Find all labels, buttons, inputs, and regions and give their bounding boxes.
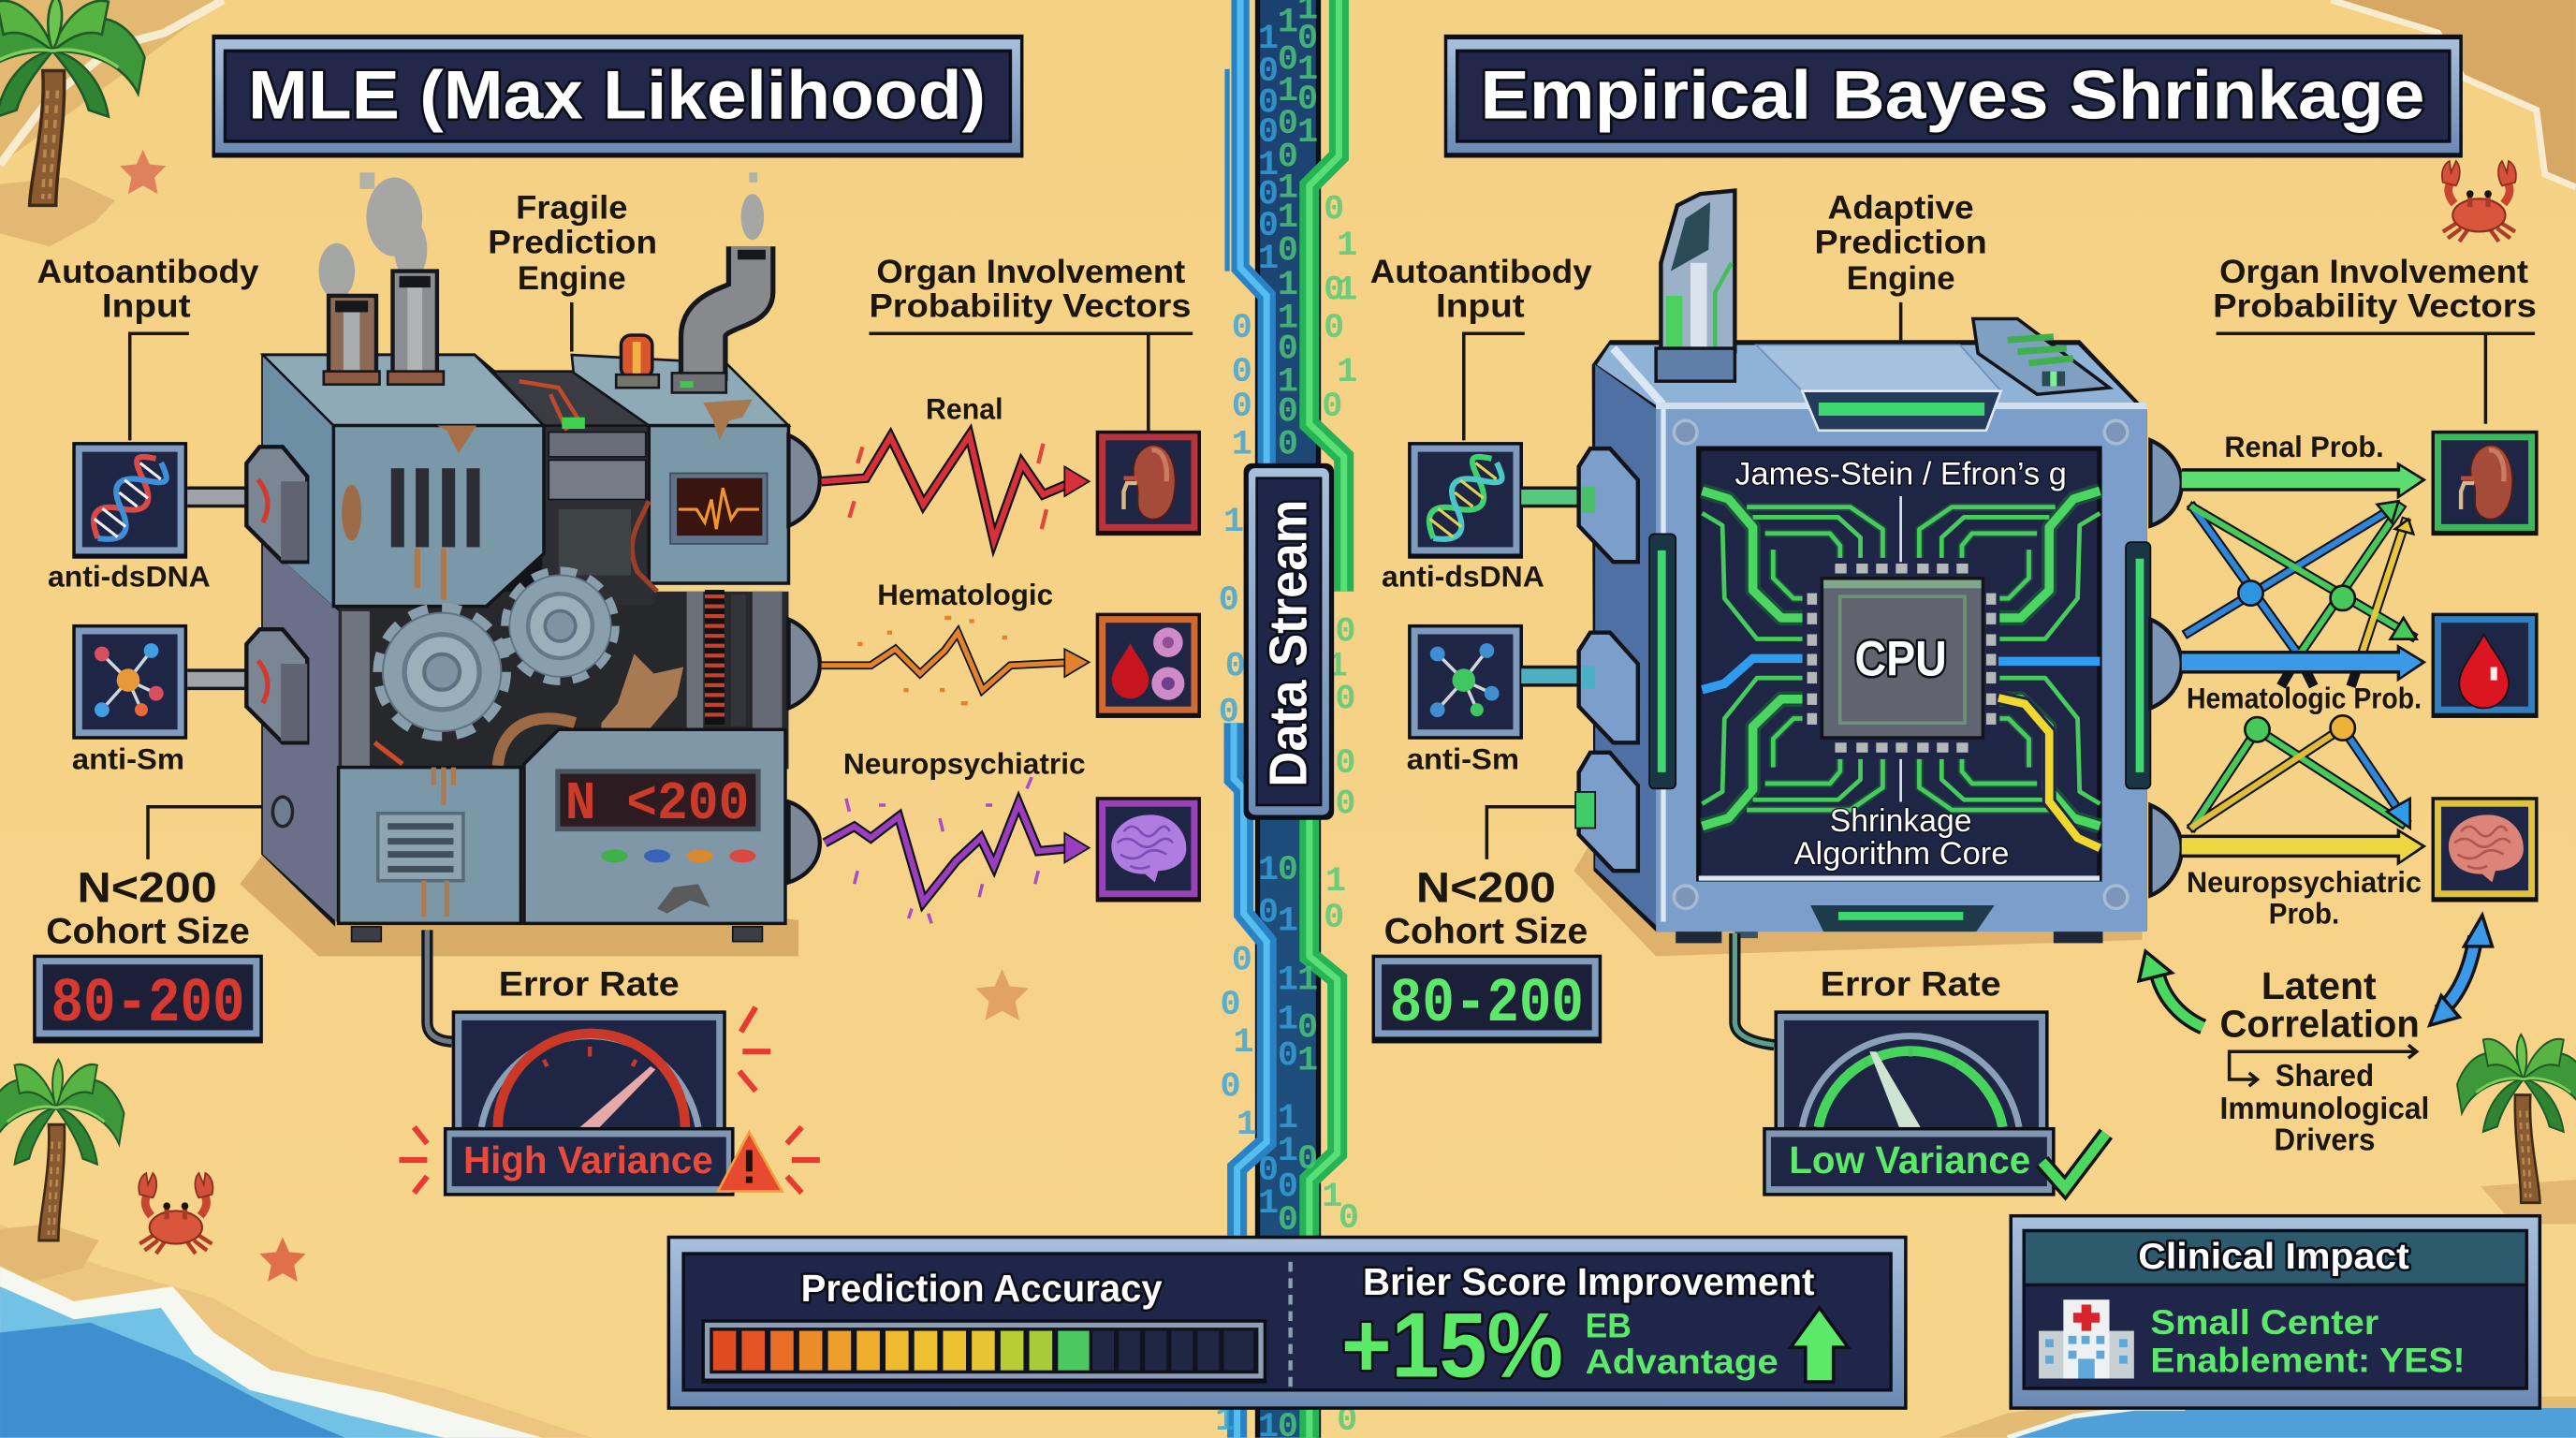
data stream channel: 1 (1337, 227, 1357, 266)
latent correlation block (2220, 964, 2429, 1158)
data stream channel: 1 (1258, 146, 1279, 185)
data stream channel: 0 (1258, 52, 1279, 92)
exhaust stack (1656, 191, 1734, 381)
left: autoantibody input label (37, 254, 259, 440)
data stream channel: 0 (1278, 1201, 1298, 1240)
output knobs (788, 435, 820, 882)
data stream channel: 0 (1219, 581, 1239, 621)
correlation network (2188, 501, 2417, 829)
warning lamp (616, 335, 659, 388)
warning triangle with alert rays (400, 1007, 820, 1193)
left error rate gauge: High Variance (463, 1138, 713, 1181)
clinical impact panel (2009, 1214, 2541, 1410)
latent correlation block: Shared (2276, 1059, 2374, 1093)
right engine label: Engine (1847, 260, 1955, 297)
data stream channel: 0 (1232, 388, 1252, 427)
data stream label panel: Data Stream (1258, 500, 1317, 787)
right icon: anti-Sm (1408, 624, 1523, 740)
data stream channel: 1 (1223, 503, 1244, 542)
data stream channel: 0 (1324, 309, 1344, 348)
data stream channel: 1 (1278, 902, 1298, 941)
palm tree bottom-left (0, 1060, 124, 1282)
clinical impact panel: Small Center (2150, 1303, 2378, 1342)
data stream channel: 0 (1278, 1168, 1298, 1208)
data stream channel: 0 (1219, 693, 1239, 732)
data stream channel: 1 (1278, 198, 1298, 238)
data stream channel: 0 (1278, 425, 1298, 464)
left organ icon: brain (1096, 797, 1201, 902)
intake grille (378, 768, 463, 917)
data stream channel: 1 (1297, 113, 1318, 153)
right engine label (1814, 189, 1987, 340)
left error rate gauge (427, 930, 735, 1196)
right: autoantibody input label: Input (1436, 288, 1525, 325)
data stream channel: 0 (1258, 113, 1279, 153)
blue double curved arrow (2430, 916, 2492, 1025)
red ladder (687, 590, 782, 742)
corner bolts (1674, 420, 2128, 909)
data stream channel: 1 (1278, 1001, 1298, 1040)
hematologic signal (noisy): Hematologic (877, 578, 1053, 611)
right title (1444, 35, 2463, 157)
renal signal (noisy): Renal (926, 392, 1003, 426)
data stream channel: 1 (1278, 169, 1298, 209)
yellow probability arrow: neuropsychiatric (2182, 829, 2426, 866)
data stream channel: 0 (1335, 612, 1355, 652)
screen labels: Algorithm Core (1794, 836, 2009, 872)
right cohort block: N<200 (1416, 864, 1556, 912)
left input pipes (187, 486, 263, 690)
right outputs label: Probability Vectors (2213, 288, 2537, 325)
neuropsychiatric signal (noisy) (825, 747, 1090, 923)
palm tree bottom-right (2457, 1034, 2576, 1224)
screen labels: James-Stein / Efron’s g (1734, 457, 2067, 492)
data stream channel: 0 (1221, 1068, 1241, 1108)
right cohort block: 80-200 (1390, 969, 1584, 1040)
brier score improvement: EB (1586, 1307, 1632, 1345)
brier score improvement: Advantage (1586, 1343, 1778, 1381)
right cohort block (1372, 807, 1602, 1043)
right output labels: Prob. (2269, 896, 2339, 930)
brier score improvement: Brier Score Improvement (1363, 1260, 1814, 1303)
left label: anti-Sm: anti-Sm (72, 741, 184, 775)
data stream channel: 0 (1322, 388, 1342, 427)
data stream channel: 1 (1278, 3, 1298, 42)
data stream channel: 0 (1232, 941, 1252, 980)
data stream channel: 1 (1297, 961, 1318, 1001)
data stream channel: 0 (1278, 330, 1298, 370)
data stream channel: 0 (1278, 105, 1298, 144)
data stream channel: 1 (1258, 1184, 1279, 1224)
data stream channel: 0 (1258, 1152, 1279, 1191)
data stream channel: 0 (1324, 899, 1344, 938)
data stream channel: 0 (1324, 271, 1344, 310)
data stream channel: 0 (1335, 744, 1355, 784)
data stream channel: 1 (1278, 72, 1298, 111)
latent correlation block: Drivers (2274, 1123, 2375, 1158)
starfish top-left (120, 150, 166, 194)
N<200 display: N <200 (565, 774, 749, 835)
green light slots (1649, 391, 2150, 932)
data stream channel: 1 (1278, 1099, 1298, 1138)
data stream channel: 0 (1335, 680, 1355, 719)
roof vent (1973, 318, 2110, 394)
chimneys and smoke (319, 172, 766, 392)
data stream channel: 0 (1297, 1008, 1318, 1048)
data stream channel: 0 (1225, 647, 1246, 686)
left error rate gauge: Error Rate (499, 965, 680, 1004)
data stream channel: 1 (1337, 271, 1357, 310)
right organ icon: brain (2431, 797, 2539, 902)
data stream channel: 0 (1324, 190, 1344, 229)
data stream channel: 1 (1325, 862, 1346, 902)
data stream channel: 0 (1278, 231, 1298, 271)
left engine label: Prediction (488, 224, 657, 260)
data stream channel: 0 (1278, 138, 1298, 177)
crab bottom-left (139, 1173, 212, 1254)
status buttons (601, 849, 755, 862)
data stream channel: 0 (1297, 81, 1318, 120)
left outputs label: Organ Involvement (876, 254, 1186, 290)
data stream channel: 0 (1278, 41, 1298, 81)
right title: Empirical Bayes Shrinkage (1480, 55, 2424, 133)
right cohort block: Cohort Size (1384, 911, 1588, 951)
left label: anti-dsDNA: anti-dsDNA (48, 560, 211, 594)
right engine label: Prediction (1814, 224, 1987, 260)
CPU chip: CPU (1854, 631, 1947, 686)
circuit traces (1702, 491, 2100, 848)
renal signal (noisy) (822, 392, 1090, 540)
left organ icon: blood cells (1096, 613, 1201, 718)
data stream channel: 0 (1258, 176, 1279, 215)
left outputs label: Probability Vectors (869, 288, 1191, 325)
right icon: anti-dsDNA (1408, 442, 1523, 559)
brier score improvement (1341, 1260, 1848, 1397)
data stream channel: 0 (1278, 1036, 1298, 1076)
right output labels: Renal Prob. (2224, 430, 2384, 463)
left cohort block (33, 807, 263, 1043)
left cohort block: 80-200 (51, 969, 245, 1040)
data stream channel: 1 (1278, 266, 1298, 305)
right input pipes (1521, 486, 1597, 687)
right label: anti-Sm: anti-Sm (1407, 741, 1519, 775)
left organ icon: kidney (1096, 431, 1201, 536)
right organ icon: blood drop (2431, 613, 2539, 718)
side connectors (1575, 448, 1638, 871)
right error rate gauge: Error Rate (1821, 965, 2001, 1004)
data stream channel: 1 (1278, 961, 1298, 1001)
starfish mid (975, 969, 1029, 1020)
CPU chip (1808, 564, 1996, 753)
green check mark (2042, 1134, 2106, 1188)
right engine label: Adaptive (1828, 189, 1974, 226)
right error rate gauge (1734, 933, 2056, 1196)
right output labels: Neuropsychiatric (2187, 865, 2422, 899)
data stream channel: 1 (1278, 299, 1298, 338)
data stream channel: 1 (1232, 425, 1252, 464)
left outputs label (869, 254, 1193, 431)
neuropsychiatric signal (noisy): Neuropsychiatric (843, 747, 1086, 781)
bottom metrics panel (667, 1236, 1908, 1410)
clinical impact panel: Enablement: YES! (2150, 1341, 2465, 1379)
left: autoantibody input label: Autoantibody (37, 254, 259, 290)
left icon: anti-dsDNA (72, 442, 187, 559)
left title: MLE (Max Likelihood) (248, 55, 986, 133)
data stream channel: 1 (1234, 1023, 1254, 1063)
exposed gears (342, 575, 683, 769)
left engine: fragile prediction engine (240, 172, 820, 956)
brier score improvement: +15% (1341, 1294, 1563, 1397)
data stream channel (1215, 0, 1359, 1438)
data stream channel: 0 (1232, 309, 1252, 348)
data stream channel: 0 (1335, 785, 1355, 825)
data stream channel: 1 (1278, 1132, 1298, 1171)
palm tree top-left (0, 0, 145, 246)
data stream channel: 1 (1297, 1042, 1318, 1081)
data stream channel: 0 (1258, 83, 1279, 123)
latent correlation block: Immunological (2220, 1092, 2429, 1126)
prediction accuracy (701, 1267, 1266, 1384)
right output labels (2187, 430, 2422, 930)
data stream channel: 0 (1232, 353, 1252, 392)
data stream channel: 0 (1221, 986, 1241, 1025)
latent correlation block: Correlation (2220, 1002, 2420, 1045)
vent slots with rust (342, 399, 753, 600)
right: autoantibody input label (1370, 254, 1592, 440)
data stream channel: 0 (1297, 20, 1318, 59)
right organ icon: kidney (2431, 431, 2539, 536)
data stream channel: 1 (1278, 363, 1298, 403)
right label: anti-dsDNA: anti-dsDNA (1382, 560, 1544, 594)
screen labels (1734, 457, 2067, 872)
data stream channel: 1 (1258, 240, 1279, 279)
data stream channel: 1 (1237, 1106, 1257, 1145)
data stream channel: 0 (1278, 851, 1298, 890)
green probability arrow: renal (2182, 462, 2426, 500)
oscilloscope monitor (670, 473, 768, 544)
left engine label: Engine (518, 260, 626, 297)
prediction accuracy: Prediction Accuracy (801, 1267, 1163, 1310)
data stream channel: 0 (1258, 207, 1279, 246)
right engine: adaptive prediction engine (1573, 191, 2182, 956)
latent correlation block: Latent (2261, 964, 2377, 1007)
data stream channel: 0 (1278, 392, 1298, 432)
data stream channel: 0 (1258, 894, 1279, 933)
output knobs (2150, 440, 2182, 895)
left icon: anti-Sm (72, 624, 187, 740)
blue probability arrow: hematologic (2182, 644, 2426, 682)
right error rate gauge: Low Variance (1789, 1138, 2030, 1181)
data stream label panel (1244, 463, 1334, 820)
right outputs label: Organ Involvement (2219, 254, 2528, 290)
data stream channel: 1 (1258, 20, 1279, 59)
icon: hospital (2039, 1299, 2134, 1378)
left: autoantibody input label: Input (102, 288, 191, 325)
green curved arrow (2139, 951, 2203, 1027)
right outputs label (2213, 254, 2537, 424)
crab top-right (2442, 161, 2516, 242)
data stream channel: 1 (1322, 1178, 1342, 1217)
clinical impact panel: Clinical Impact (2138, 1237, 2409, 1277)
side connectors (246, 447, 307, 827)
data stream channel: 1 (1337, 353, 1357, 392)
data stream channel: 1 (1297, 51, 1318, 90)
starfish bottom-left (259, 1238, 305, 1282)
right: autoantibody input label: Autoantibody (1370, 254, 1592, 290)
data stream channel: 0 (1339, 1199, 1359, 1239)
left engine label (488, 189, 657, 352)
data stream channel: 0 (1297, 1140, 1318, 1180)
left cohort block: Cohort Size (46, 911, 250, 951)
left engine label: Fragile (516, 189, 627, 226)
screen (1699, 448, 2100, 879)
right output labels: Hematologic Prob. (2187, 681, 2422, 714)
screen labels: Shrinkage (1830, 803, 1972, 839)
left title (212, 35, 1023, 157)
left cohort block: N<200 (78, 864, 217, 912)
data stream channel: 1 (1258, 851, 1279, 890)
hematologic signal (noisy) (822, 578, 1090, 703)
data stream channel: 1 (1327, 647, 1348, 686)
